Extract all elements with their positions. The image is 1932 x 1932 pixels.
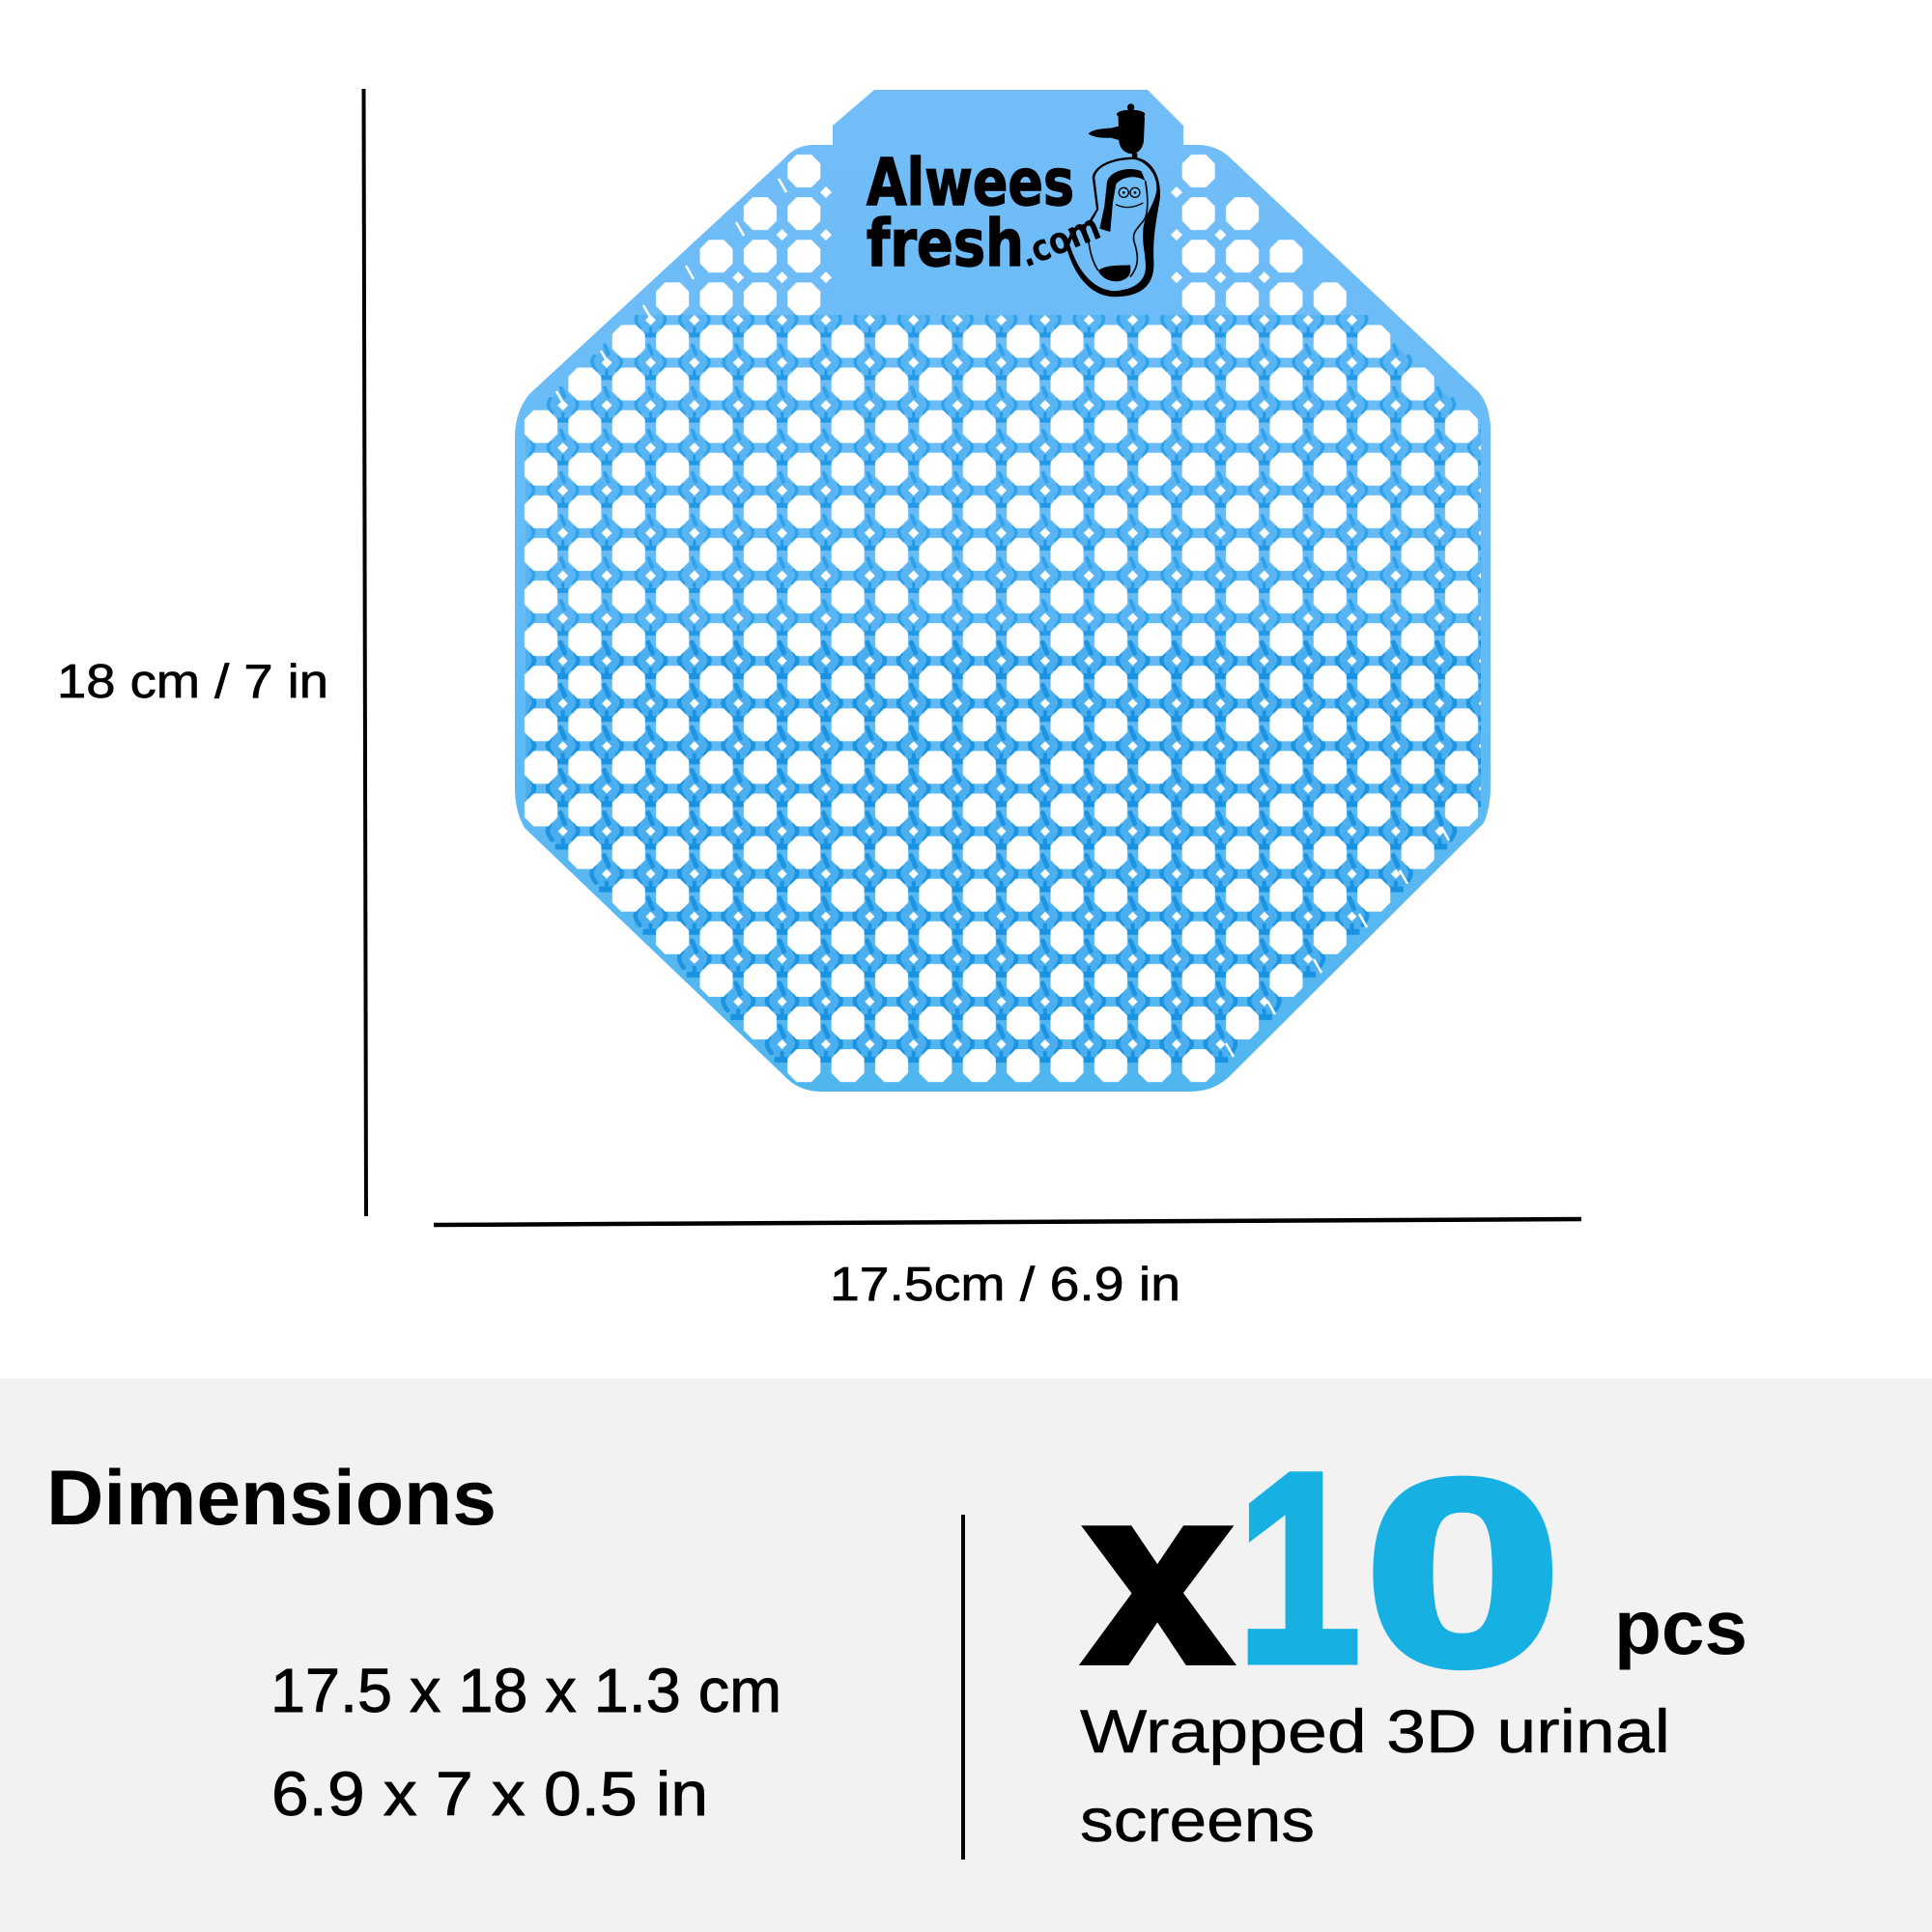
horizontal dimension line: [434, 1219, 1581, 1225]
quantity: x10: 1: [1237, 1417, 1360, 1718]
vertical dimension line: [363, 89, 366, 1216]
panel: bottom details: [0, 1378, 1932, 1932]
width label: 17.5cm / 6.9 in: [830, 1259, 1180, 1311]
description: [1080, 1698, 1670, 1855]
quantity: x10: [1087, 1417, 1561, 1719]
logo icon: urinal character: [1065, 103, 1160, 297]
height label: 18 cm / 7 in: [57, 656, 328, 708]
description: screens: [1080, 1787, 1315, 1855]
quantity: x10: 0: [1365, 1426, 1561, 1719]
divider: [961, 1515, 965, 1860]
product: octagonal urinal screen: [515, 90, 1491, 1092]
logo text: Alwees: [867, 145, 1074, 220]
metric dimensions: 17.5 x 18 x 1.3 cm: [270, 1656, 781, 1725]
logo text: fresh: [867, 206, 1024, 281]
node detail grid: [526, 171, 1481, 1065]
pcs label: pcs: [1614, 1584, 1747, 1670]
imperial dimensions: 6.9 x 7 x 0.5 in: [271, 1759, 708, 1829]
screen holes: [519, 150, 1484, 1087]
logo text: [867, 145, 1106, 281]
screen body: [515, 90, 1491, 1092]
logo text: .com: [1013, 205, 1106, 275]
description: Wrapped 3D urinal: [1080, 1698, 1670, 1766]
heading: Dimensions: Dimensions: [46, 1455, 497, 1542]
edge slits: [556, 179, 1449, 1057]
quantity: x10: x: [1087, 1438, 1229, 1714]
